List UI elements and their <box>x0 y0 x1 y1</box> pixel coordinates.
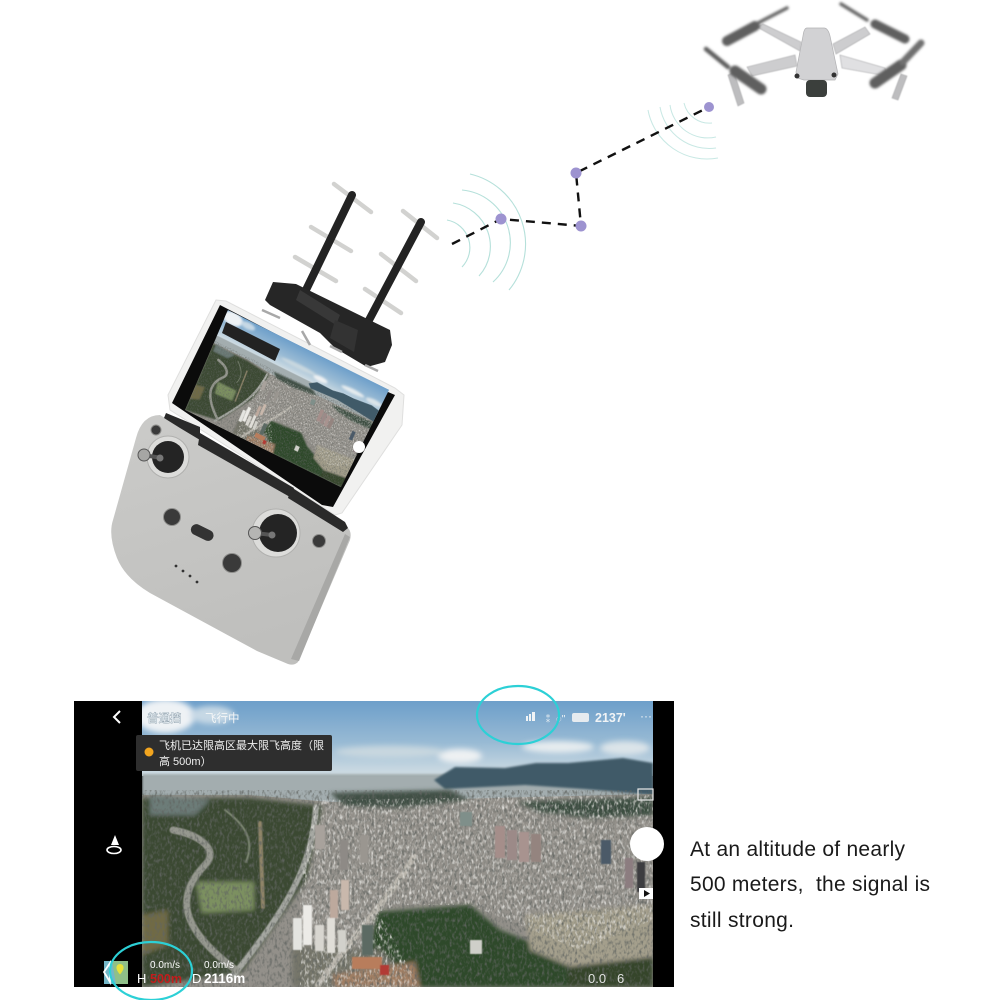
remote controller with phone and antennas <box>111 184 437 665</box>
back chevron <box>114 711 120 723</box>
telemetry: 2116m <box>204 971 245 986</box>
right joystick <box>248 509 300 557</box>
altitude warning box: 飞机已达限高区最大限飞高度（限 <box>159 738 324 752</box>
drone camera <box>806 80 827 97</box>
signal waves near drone <box>648 103 718 159</box>
drone propellers <box>706 4 921 89</box>
phone screen <box>172 305 395 507</box>
antenna rods <box>295 184 437 313</box>
telemetry: 0.0m/s <box>204 960 234 971</box>
altitude warning box: 高 500m） <box>159 754 212 768</box>
controller side shade <box>291 534 350 661</box>
shutter button <box>630 827 664 861</box>
phone shutter <box>353 441 365 453</box>
telemetry: D <box>192 971 201 986</box>
flight mode labels: 飞行中 <box>205 712 240 725</box>
status bar: ⁑ ◌" <box>543 713 566 725</box>
mode switch <box>189 522 215 543</box>
screen frame <box>74 701 674 987</box>
telemetry: 6 <box>617 971 624 986</box>
flight mode labels <box>147 711 240 725</box>
signal waves near controller <box>447 174 526 290</box>
map thumbnail <box>104 961 128 984</box>
phone clamp bottom <box>164 413 348 532</box>
controller buttons <box>151 425 326 572</box>
caption text: still strong. <box>690 909 794 932</box>
status bar: ··· <box>640 709 652 723</box>
telemetry: 0.0m/s <box>150 960 180 971</box>
drone arms <box>728 24 907 106</box>
telemetry: 0.0 <box>588 971 606 986</box>
phone aerial image <box>183 308 390 490</box>
antenna stems <box>305 195 421 322</box>
controller body <box>111 415 351 665</box>
dashed signal path <box>452 102 714 244</box>
left joystick <box>138 436 189 478</box>
caption text: 500 meters, the signal is <box>690 873 930 896</box>
aerial photo <box>135 699 653 987</box>
caption text <box>690 838 930 932</box>
gimbal icon <box>107 835 121 854</box>
flight mode labels: 普通挡 <box>147 711 182 725</box>
telemetry: H <box>137 971 146 986</box>
phone clamp metal <box>262 310 378 371</box>
phone clamp top <box>265 282 392 367</box>
caption text: At an altitude of nearly <box>690 838 906 861</box>
altitude warning box <box>136 735 332 771</box>
callout ellipse: altitude <box>110 942 192 1000</box>
status bar <box>526 709 652 725</box>
drone body <box>796 28 838 80</box>
battery level dots <box>175 565 198 583</box>
drone <box>706 4 921 106</box>
phone body <box>168 300 404 515</box>
telemetry <box>137 960 624 986</box>
app screenshot <box>74 699 674 987</box>
phone notification bar <box>222 322 280 361</box>
status bar: 2137' <box>595 711 626 725</box>
callout ellipse: signal <box>477 686 559 744</box>
side icons <box>638 789 653 899</box>
telemetry: 500m <box>150 972 182 986</box>
